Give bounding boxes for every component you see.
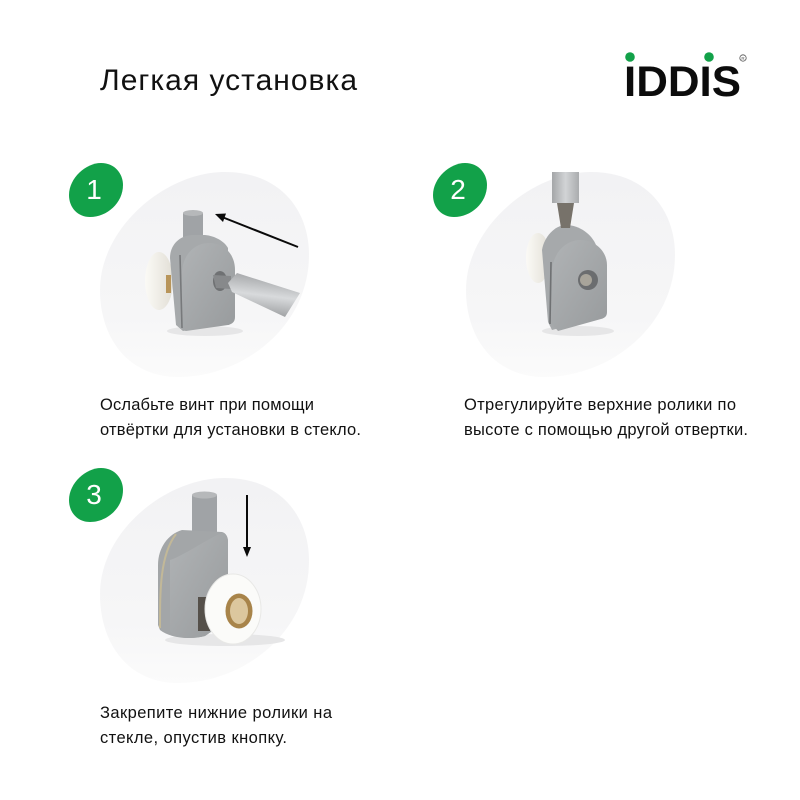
caption 3: Закрепите нижние ролики на	[100, 704, 333, 722]
roller with wheel	[158, 492, 285, 646]
caption 2: Отрегулируйте верхние ролики по	[464, 396, 736, 414]
caption 2	[464, 396, 748, 439]
badge 2	[433, 163, 487, 217]
caption 3: стекле, опустив кнопку.	[100, 729, 287, 747]
arrow 3	[243, 495, 251, 557]
title: Легкая установка	[100, 64, 357, 97]
caption 3	[100, 704, 333, 747]
panel: step 3	[69, 468, 333, 747]
photo blob 1	[100, 172, 309, 377]
logo: IDDIS: IDDIS	[624, 58, 741, 106]
photo blob 3	[100, 478, 309, 683]
caption 2: высоте с помощью другой отвертки.	[464, 421, 748, 439]
badge 3: 3	[86, 479, 102, 510]
caption 1: Ослабьте винт при помощи	[100, 396, 314, 414]
roller with screwdriver	[145, 210, 300, 336]
arrow 1	[215, 214, 298, 247]
panel: step 2	[433, 163, 748, 439]
badge 2: 2	[450, 174, 466, 205]
logo: IDDIS: R	[741, 56, 745, 61]
panel: step 1	[69, 163, 361, 439]
photo blob 2	[466, 172, 675, 377]
badge 3	[69, 468, 123, 522]
caption 1: отвёртки для установки в стекло.	[100, 421, 361, 439]
caption 1	[100, 396, 361, 439]
badge 1	[69, 163, 123, 217]
badge 1: 1	[86, 174, 102, 205]
roller with screw	[526, 172, 614, 336]
